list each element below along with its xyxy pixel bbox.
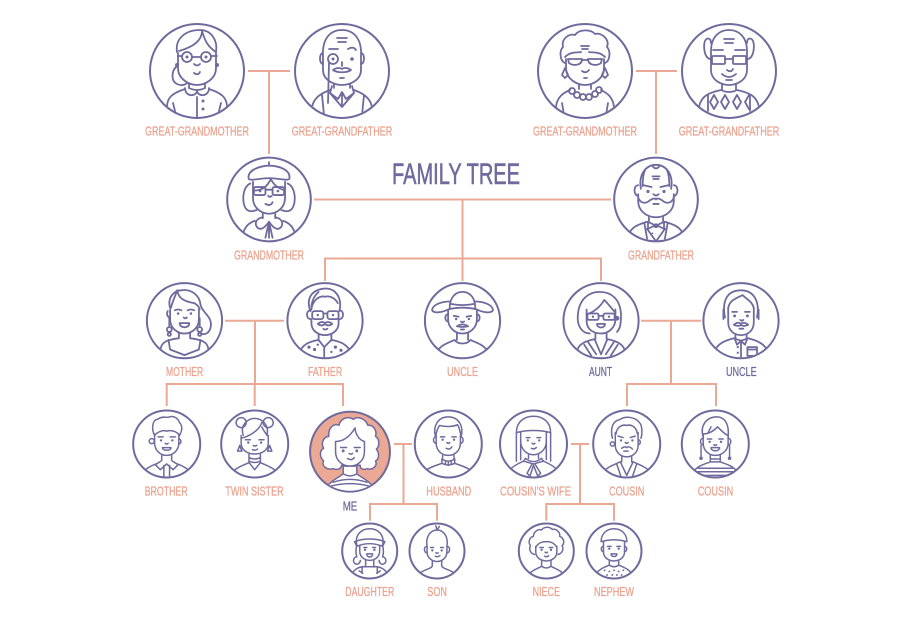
person: mother [147, 283, 222, 379]
person: great-grandfather left [292, 24, 392, 138]
icon: me portrait, highlighted [310, 412, 390, 492]
label: AUNT [589, 364, 612, 379]
person: father [287, 283, 363, 379]
person: great-grandfather right [679, 24, 779, 138]
person: brother [133, 410, 200, 499]
label: FATHER [308, 364, 342, 379]
icon: great-grandmother portrait [538, 24, 632, 118]
icon: grandfather portrait [614, 158, 698, 241]
person: grandfather [614, 158, 698, 262]
icon: cousin portrait [682, 410, 749, 478]
person: cousin with moustache [593, 410, 660, 499]
icon: mother portrait [147, 283, 222, 358]
label: UNCLE [726, 364, 757, 379]
label: DAUGHTER [345, 584, 394, 599]
icon: grandmother portrait [227, 158, 311, 241]
icon: aunt portrait [563, 283, 639, 358]
icon: son portrait [410, 524, 464, 578]
connector: me and husband to children [370, 444, 437, 521]
label: GRANDFATHER [628, 247, 694, 262]
icon: cousin portrait [593, 410, 660, 478]
connector: grandparents to their children [314, 200, 611, 281]
icon: husband portrait [415, 410, 482, 478]
label: GREAT-GRANDFATHER [292, 123, 392, 138]
icon: uncle portrait [425, 283, 500, 358]
icon: cousin's wife portrait [500, 410, 567, 478]
label: COUSIN [698, 484, 733, 499]
icon: niece portrait [519, 524, 574, 578]
connector: cousin couple to children [546, 444, 614, 521]
person: nephew [587, 524, 641, 599]
person: daughter [342, 524, 397, 599]
icon: twin sister portrait [221, 410, 288, 478]
label: GREAT-GRANDFATHER [679, 123, 779, 138]
person: son [410, 524, 464, 599]
person: husband [415, 410, 482, 499]
person: cousin's wife [500, 410, 571, 499]
label: COUSIN [609, 484, 644, 499]
person: great-grandmother left [145, 24, 249, 138]
label: NEPHEW [594, 584, 635, 599]
label: GREAT-GRANDMOTHER [145, 123, 249, 138]
label: MOTHER [166, 364, 203, 379]
person: great-grandmother right [533, 24, 637, 138]
icon: nephew portrait [587, 524, 641, 578]
label: UNCLE [447, 364, 478, 379]
icon: great-grandfather portrait [295, 24, 389, 118]
icon: father portrait [287, 283, 363, 358]
connector: aunt and uncle to cousins [627, 321, 716, 406]
connector: right great-grandparents to grandfather [636, 71, 677, 154]
person: cousin with earrings [682, 410, 749, 499]
label: NIECE [533, 584, 560, 599]
icon: brother portrait [133, 410, 200, 478]
label: GRANDMOTHER [234, 247, 304, 262]
icon: uncle portrait [703, 283, 779, 358]
person: uncle by marriage [703, 283, 779, 379]
person: twin sister [221, 410, 288, 499]
label: HUSBAND [426, 484, 471, 499]
label: ME [343, 499, 358, 514]
title: FAMILY TREE [392, 158, 520, 191]
person: niece [519, 524, 574, 599]
connector: parents to their children [167, 321, 343, 406]
person: grandmother [227, 158, 311, 262]
label: SON [427, 584, 447, 599]
icon: daughter portrait [342, 524, 397, 578]
person: aunt [563, 283, 639, 379]
icon: great-grandmother portrait [150, 24, 244, 118]
label: TWIN SISTER [225, 484, 284, 499]
label: GREAT-GRANDMOTHER [533, 123, 637, 138]
label: COUSIN'S WIFE [500, 484, 571, 499]
label: BROTHER [145, 484, 188, 499]
person: uncle with hat [425, 283, 500, 379]
icon: great-grandfather portrait [682, 24, 776, 118]
person: me [310, 412, 390, 514]
connector: left great-grandparents to grandmother [248, 71, 290, 154]
